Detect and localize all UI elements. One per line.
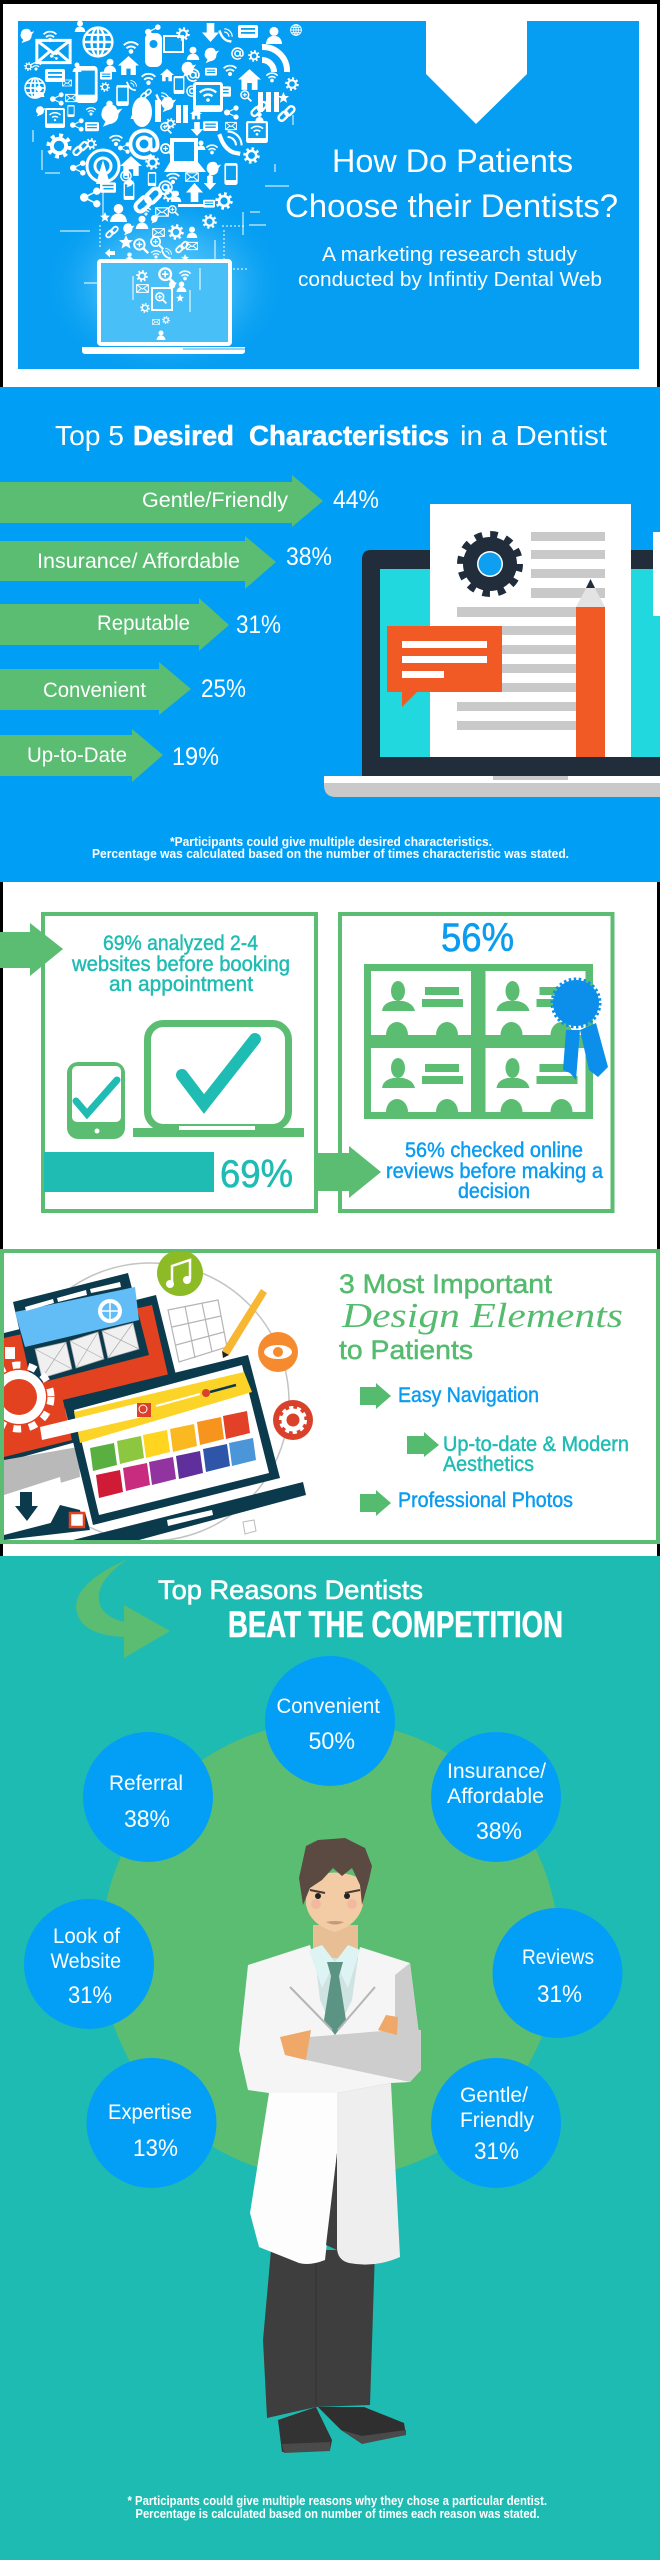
heading: 3 most important design elements: 3 Most Important — [339, 1269, 553, 1299]
icon: review cards grid — [364, 964, 593, 1119]
panel: header blue card — [18, 21, 639, 369]
bubble: gentle/friendly 31% — [431, 2058, 561, 2188]
title — [285, 143, 618, 224]
heading: beat the competition: Top Reasons Dentists — [158, 1575, 423, 1605]
list item: professional photos: Professional Photos — [398, 1489, 573, 1512]
heading: beat the competition — [158, 1575, 563, 1645]
panel: top 5 desired characteristics — [0, 387, 660, 882]
subtitle: A marketing research study — [322, 244, 577, 266]
bubble: convenient 50%: Convenient — [276, 1695, 380, 1718]
list item: easy navigation: Easy Navigation — [398, 1384, 539, 1407]
bar arrow: up-to-date 19%: Up-to-Date — [27, 744, 127, 767]
bubble: look of website 31%: Look of — [53, 1925, 120, 1948]
text: 56% checked: decision — [458, 1180, 530, 1203]
green backdrop circle — [101, 1721, 559, 2179]
bar arrow: gentle/friendly 44%: 44% — [333, 486, 379, 514]
bubble: reviews 31%: 31% — [537, 1981, 582, 2008]
bar arrow: insurance/affordable 38% — [0, 536, 332, 589]
bubble: gentle/friendly 31%: Gentle/ — [460, 2084, 528, 2107]
bubble: insurance/affordable 38% — [431, 1732, 561, 1862]
bubble: gentle/friendly 31%: Friendly — [460, 2109, 534, 2132]
subtitle: conducted by Infintiy Dental Web — [298, 269, 602, 291]
panel: 69% analyzed websites — [43, 914, 316, 1211]
bar arrow: insurance/affordable 38%: 38% — [286, 543, 332, 571]
icon: blue ribbon — [552, 979, 608, 1080]
arrow: between panels — [316, 1146, 381, 1198]
bubble: referral 38%: Referral — [109, 1772, 183, 1795]
panel: research stats — [0, 882, 657, 1249]
title: How Do Patients — [332, 143, 573, 179]
bubble: reviews 31%: Reviews — [522, 1946, 594, 1969]
footnote: characteristics — [92, 834, 569, 861]
bubble: insurance/affordable 38%: 38% — [476, 1818, 522, 1845]
bar arrow: gentle/friendly 44% — [0, 475, 379, 527]
footnote: characteristics: *Participants could give multiple desired characteristics. — [170, 834, 492, 849]
heading: 3 most important design elements: Design Elements — [341, 1296, 623, 1335]
bubble: gentle/friendly 31%: 31% — [474, 2138, 519, 2165]
bar: 69%: 69% — [220, 1153, 293, 1196]
bubble: insurance/affordable 38%: Insurance/ — [447, 1760, 546, 1783]
bubble: reviews 31% — [492, 1908, 622, 2038]
text: 69% analyzed: an appointment — [109, 973, 253, 996]
bubble: expertise 13%: Expertise — [108, 2101, 192, 2124]
icon: curved arrow — [76, 1559, 170, 1658]
bar arrow: up-to-date 19%: 19% — [172, 743, 219, 771]
heading: top 5 desired characteristics — [55, 420, 607, 451]
bar arrow: reputable 31%: Reputable — [97, 612, 190, 635]
icon: phone with check — [67, 1062, 125, 1139]
bar: 69% — [44, 1152, 293, 1196]
bubble: expertise 13% — [86, 2058, 216, 2188]
icon: white pentagon banner — [426, 21, 527, 124]
heading: top 5 desired characteristics: Top 5 — [55, 420, 124, 451]
heading: 3 most important design elements — [339, 1269, 623, 1365]
bubble: convenient 50%: 50% — [308, 1728, 355, 1755]
bar arrow: up-to-date 19% — [0, 729, 219, 782]
bar arrow: insurance/affordable 38%: Insurance/ Affordable — [37, 550, 240, 573]
bar arrow: reputable 31% — [0, 598, 281, 651]
bubble: insurance/affordable 38%: Affordable — [447, 1785, 544, 1808]
arrow: into first panel — [0, 923, 63, 976]
title: Choose their Dentists? — [285, 188, 618, 224]
panel: header frame — [3, 4, 657, 387]
text: 69% analyzed: 69% analyzed 2-4 — [103, 932, 258, 955]
bubble: look of website 31%: 31% — [68, 1982, 112, 2009]
panel: 56% checked reviews — [340, 914, 612, 1211]
text: 56% checked — [386, 1139, 603, 1203]
text: 56% checked: reviews before making a — [386, 1160, 603, 1183]
list item: up-to-date and modern aesthetics: Aesthetics — [443, 1453, 534, 1476]
bar arrow: gentle/friendly 44%: Gentle/Friendly — [142, 489, 289, 512]
text: 69% analyzed — [71, 932, 290, 996]
stat: 56%: 56% — [441, 916, 514, 960]
list item: professional photos — [360, 1489, 573, 1516]
heading: top 5 desired characteristics: in a Dentist — [460, 420, 607, 451]
footnote: reasons: * Participants could give multiple reasons why they chose a particular dentist. — [128, 2493, 547, 2508]
heading: top 5 desired characteristics: Desired — [133, 420, 234, 451]
text: 56% checked: 56% checked online — [405, 1139, 583, 1162]
panel: design elements — [0, 1250, 658, 1556]
bubble: referral 38% — [83, 1732, 213, 1862]
list item: up-to-date and modern aesthetics — [407, 1432, 629, 1476]
footnote: reasons: Percentage is calculated based on number of times each reason was stated. — [136, 2506, 540, 2521]
heading: top 5 desired characteristics: Characteristics — [249, 420, 449, 451]
footnote: characteristics: Percentage was calculated based on the number of times characteristic was stated. — [92, 846, 569, 861]
subtitle — [298, 244, 602, 291]
bar arrow: convenient 25%: Convenient — [43, 679, 146, 702]
footnote: reasons — [128, 2493, 547, 2521]
panel: top reasons — [0, 1556, 660, 2560]
text: 69% analyzed: websites before booking — [71, 953, 290, 976]
bubble: expertise 13%: 13% — [133, 2135, 178, 2162]
illustration: web design tools — [0, 1250, 313, 1541]
bubble: convenient 50% — [265, 1656, 395, 1786]
bubble: look of website 31%: Website — [50, 1950, 121, 1973]
list item: easy navigation — [360, 1383, 539, 1409]
heading: 3 most important design elements: to Patients — [339, 1335, 473, 1365]
illustration: dentist figure — [239, 1838, 421, 2453]
icon: funnel of web icons into laptop — [21, 21, 301, 380]
bar arrow: convenient 25% — [0, 662, 246, 715]
icon: laptop with check — [133, 1024, 304, 1137]
bubble: referral 38%: 38% — [124, 1806, 170, 1833]
illustration: laptop with document — [324, 504, 660, 797]
bubble: look of website 31% — [24, 1899, 154, 2029]
bar arrow: convenient 25%: 25% — [201, 675, 246, 703]
bar arrow: reputable 31%: 31% — [236, 611, 281, 639]
list item: up-to-date and modern aesthetics: Up-to-date & Modern — [443, 1433, 629, 1456]
